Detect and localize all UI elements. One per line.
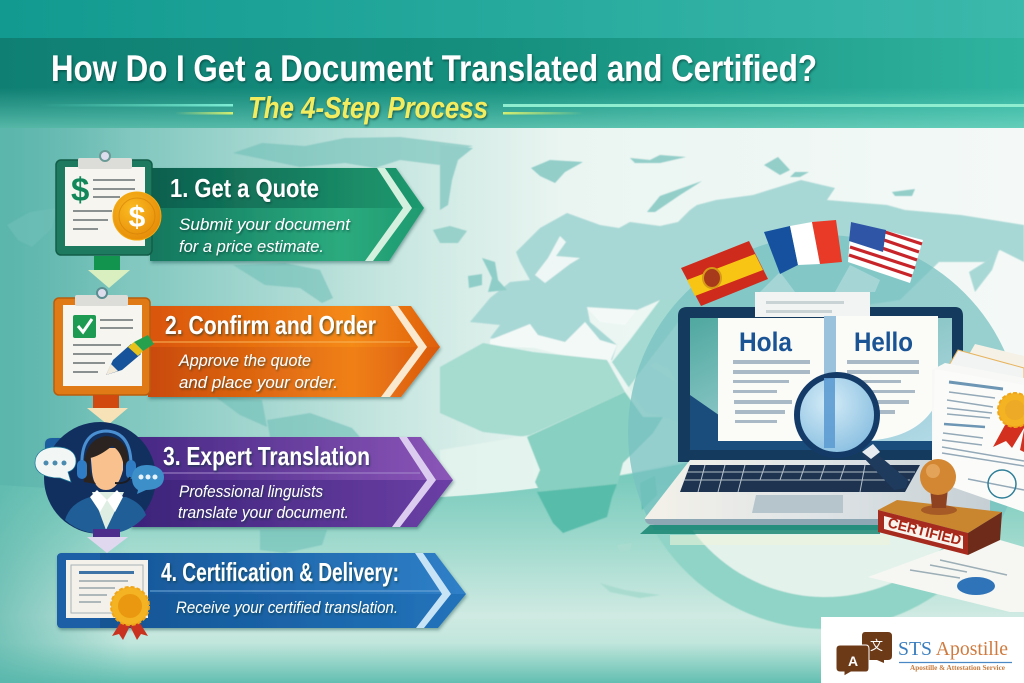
logo icon: 文 xyxy=(870,638,883,653)
trackpad xyxy=(752,495,843,513)
map: north-west land masses xyxy=(7,137,473,553)
step 3 text: Professional linguists xyxy=(179,482,323,501)
step 1 text: for a price estimate. xyxy=(179,237,324,256)
step 1 heading: 1. Get a Quote xyxy=(170,173,319,203)
map: Mediterranean sea xyxy=(490,308,637,362)
logo icon xyxy=(836,632,892,676)
keyboard xyxy=(680,465,920,492)
step 4 xyxy=(57,553,466,640)
step 3 xyxy=(35,422,453,534)
top band xyxy=(0,0,1024,38)
agent hair xyxy=(83,436,129,484)
map: south-east islands xyxy=(600,543,660,598)
agent face xyxy=(90,448,123,490)
map: pale equatorial band xyxy=(440,320,700,497)
logo tagline: Apostille & Attestation Service xyxy=(910,664,1005,672)
step 2 text xyxy=(178,351,338,392)
logo icon: A xyxy=(848,653,858,669)
certificate seal xyxy=(993,393,1024,452)
step 4 text: Receive your certified translation. xyxy=(176,599,398,617)
map: Middle East xyxy=(612,300,690,425)
step 1 text: Submit your document xyxy=(179,215,351,234)
map: globe ring xyxy=(657,530,944,630)
step 1 text xyxy=(179,215,351,256)
step 2 clipboard icon xyxy=(54,288,154,395)
step 2 xyxy=(54,288,440,397)
pencil xyxy=(106,335,154,375)
document: Hello: Hello xyxy=(854,327,913,357)
back document xyxy=(755,292,870,324)
laptop screen xyxy=(678,307,963,462)
certificate stack xyxy=(932,344,1024,512)
map: Baltic sea xyxy=(535,236,580,283)
stamp xyxy=(878,459,1002,555)
world map xyxy=(7,137,1024,629)
map: arctic coast and islands xyxy=(440,145,915,212)
illustration: laptop and documents xyxy=(640,220,1024,612)
heading band xyxy=(0,38,1024,128)
step 1 clipboard icon: $ xyxy=(71,171,89,208)
step 4 certificate icon xyxy=(66,560,149,640)
step 4 banner xyxy=(57,553,466,628)
flag: France xyxy=(764,220,842,274)
globe behind laptop xyxy=(628,236,1008,530)
laptop base xyxy=(640,460,990,545)
map: Madagascar xyxy=(640,476,657,510)
magnifying glass xyxy=(797,375,908,490)
arrow 1 to 2 xyxy=(88,256,130,288)
subtitle lines xyxy=(40,104,1024,114)
coin: $ xyxy=(129,201,146,234)
speech bubbles xyxy=(35,447,164,494)
step 1 xyxy=(56,151,424,261)
subtitle: The 4-Step Process xyxy=(248,90,488,125)
map: Africa middle xyxy=(527,392,663,492)
agent headset xyxy=(82,431,131,468)
step 2 heading: 2. Confirm and Order xyxy=(165,310,376,340)
map: British Isles xyxy=(468,258,507,292)
flag: Spain xyxy=(681,241,768,306)
arrow 2 to 3 xyxy=(87,395,128,425)
document: Hola: Hola xyxy=(739,327,793,357)
step 3 text xyxy=(178,482,349,522)
document: Hola xyxy=(718,318,824,441)
map: Africa north xyxy=(440,343,625,437)
step 3 text: translate your document. xyxy=(178,503,349,522)
step 2 text: Approve the quote xyxy=(178,351,311,370)
map: Africa south xyxy=(537,484,617,533)
stamp handle xyxy=(920,459,957,515)
document: Hello xyxy=(836,316,938,441)
map: Europe and Asia xyxy=(470,180,1024,360)
logo name: STS Apostille xyxy=(898,638,1008,660)
step 3 heading: 3. Expert Translation xyxy=(163,441,370,471)
flag rays xyxy=(760,265,880,292)
title: How Do I Get a Document Translated and Certified? xyxy=(51,48,817,89)
arrow 3 to 4 xyxy=(87,529,128,553)
step 3 agent icon xyxy=(35,422,164,534)
step 1 banner xyxy=(150,168,424,261)
logo: STS Apostille xyxy=(821,617,1024,683)
logo rule xyxy=(899,662,1012,664)
stamp: CERTIFIED xyxy=(886,515,963,549)
map: Japan xyxy=(969,250,999,292)
lower document xyxy=(868,540,1024,612)
agent shoulders xyxy=(65,497,146,534)
medal xyxy=(111,587,149,640)
flag: USA xyxy=(848,222,923,283)
step 2 banner xyxy=(148,306,440,397)
step 1 clipboard icon xyxy=(56,151,161,255)
step 2 text: and place your order. xyxy=(179,373,338,392)
step 4 heading: 4. Certification & Delivery: xyxy=(161,557,399,587)
step 3 banner xyxy=(45,437,453,527)
